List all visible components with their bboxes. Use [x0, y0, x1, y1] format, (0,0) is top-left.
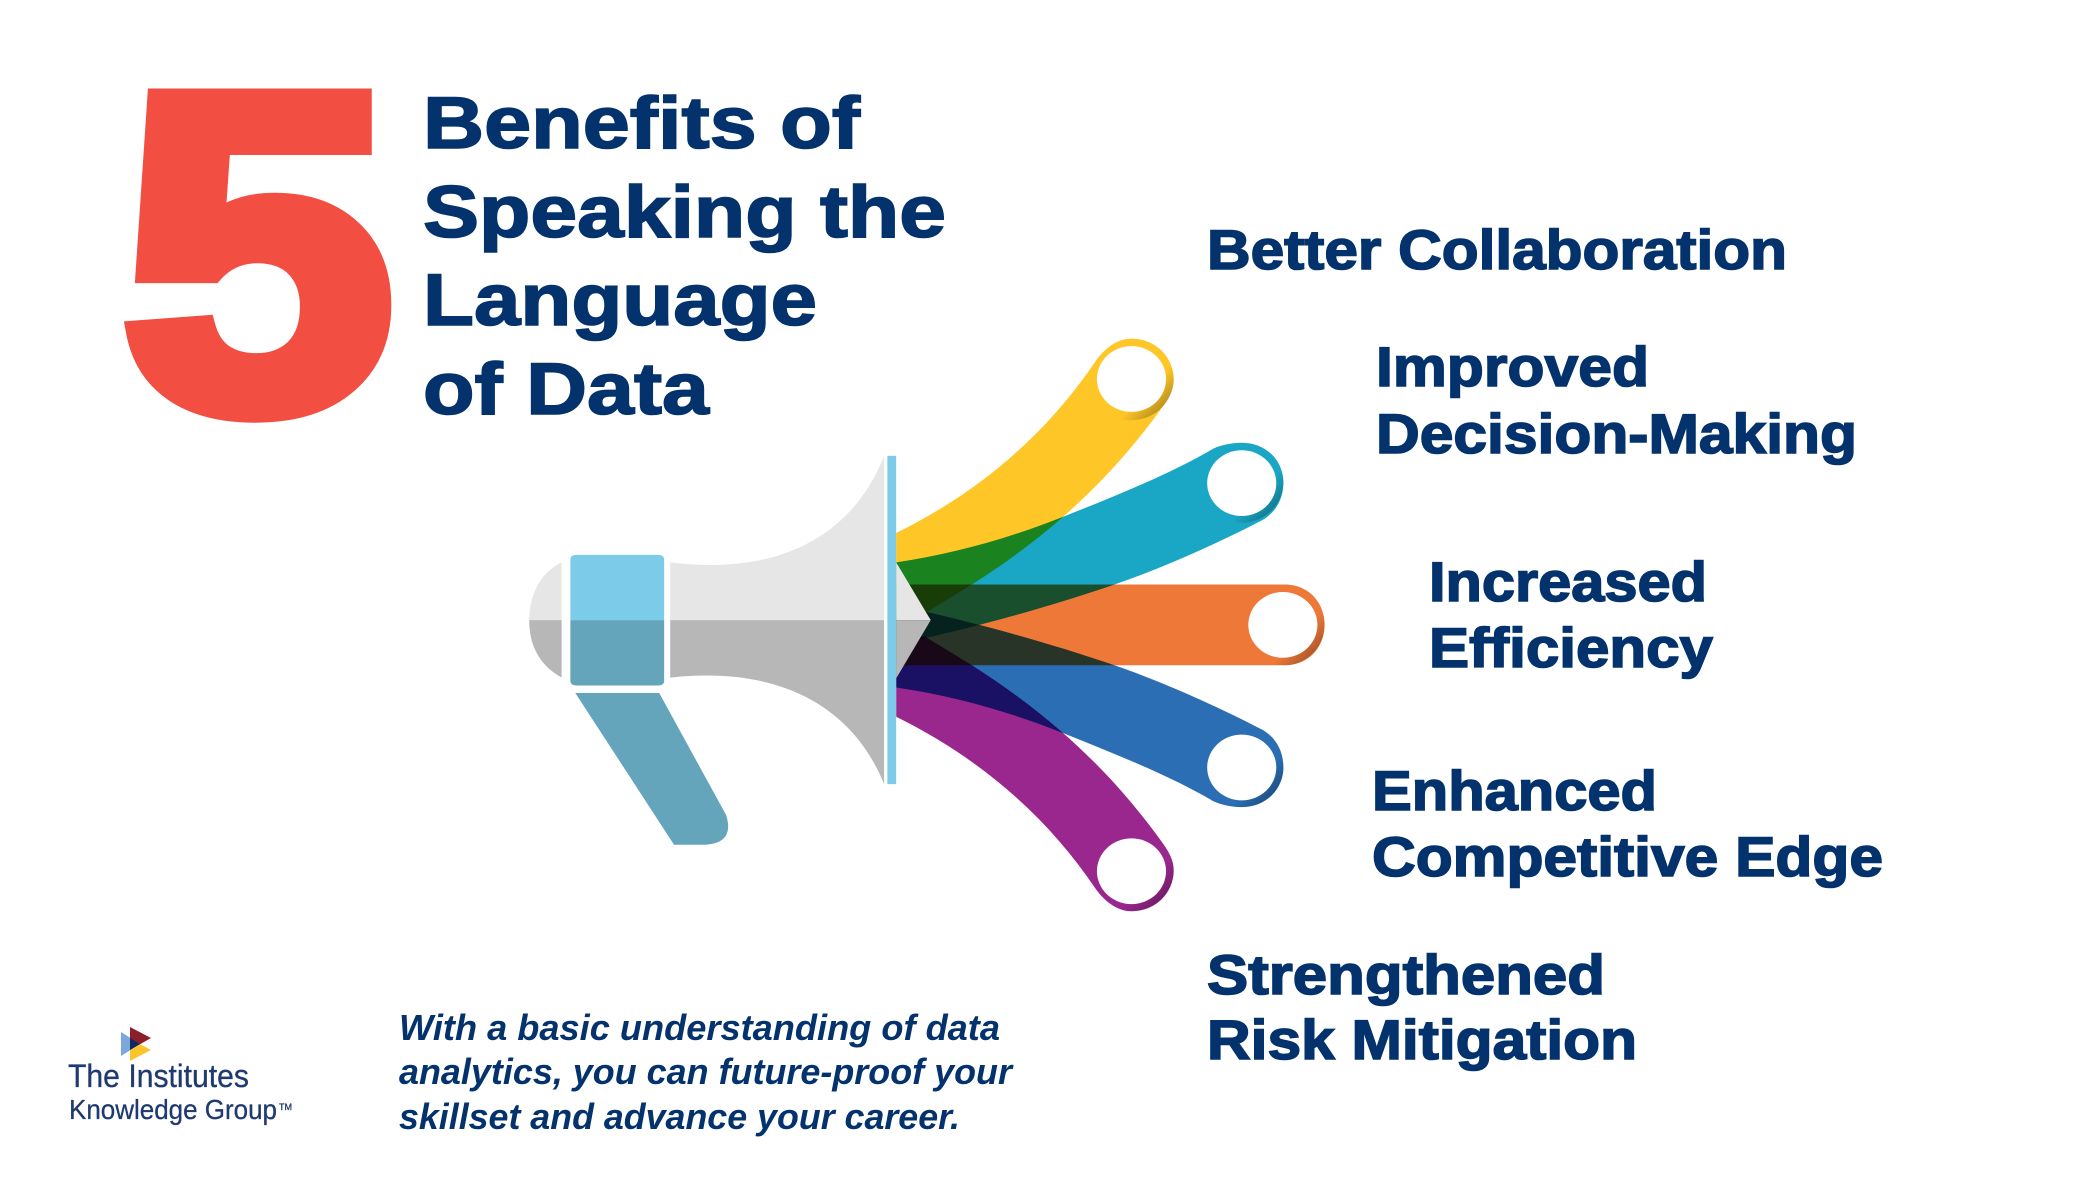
label: Improved Decision-Making: Improved	[1376, 335, 1649, 398]
label: Strengthened Risk Mitigation	[1207, 943, 1637, 1071]
logo text: TM	[279, 1102, 292, 1112]
label: Strengthened Risk Mitigation: Risk Mitigation	[1207, 1008, 1637, 1071]
title: of Data	[423, 349, 711, 430]
title	[423, 83, 946, 430]
megaphone grip	[570, 555, 664, 686]
cap shading	[1088, 339, 1325, 911]
italic tagline: analytics, you can future-proof your	[399, 1051, 1014, 1092]
logo text: Knowledge Group	[69, 1094, 277, 1125]
megaphone rim	[887, 456, 896, 784]
megaphone handle	[575, 693, 728, 845]
label: Increased Efficiency: Efficiency	[1429, 616, 1713, 679]
ribbon: purple	[896, 637, 1174, 911]
logo text	[68, 1058, 292, 1125]
italic tagline: With a basic understanding of data	[399, 1007, 1000, 1048]
ribbon: yellow	[896, 339, 1174, 613]
ribbon: orange	[896, 585, 1325, 665]
label: Better Collaboration: Better Collaboration	[1207, 218, 1787, 281]
megaphone with ribbons	[529, 339, 1325, 911]
label: Increased Efficiency: Increased	[1429, 550, 1707, 613]
logo text: The Institutes	[68, 1058, 249, 1094]
label: Improved Decision-Making	[1376, 335, 1857, 465]
big number 5: 5	[122, 2, 394, 504]
italic tagline: skillset and advance your career.	[399, 1096, 960, 1137]
label: Enhanced Competitive Edge: Enhanced	[1372, 759, 1657, 822]
ribbon: blue	[896, 611, 1283, 807]
white circles	[1097, 346, 1317, 904]
italic tagline	[399, 1007, 1014, 1137]
logo mark	[121, 1027, 151, 1061]
label: Strengthened Risk Mitigation: Strengthened	[1207, 943, 1605, 1006]
title: Language	[423, 260, 817, 341]
label: Enhanced Competitive Edge	[1372, 759, 1883, 888]
title: Speaking the	[423, 172, 946, 253]
title: Benefits of	[423, 83, 861, 164]
label: Enhanced Competitive Edge: Competitive Edge	[1372, 825, 1883, 888]
label: Increased Efficiency	[1429, 550, 1713, 679]
ribbon: teal	[896, 443, 1283, 639]
ribbons	[896, 339, 1325, 911]
logo	[68, 1027, 292, 1125]
megaphone horn	[529, 456, 931, 784]
label: Improved Decision-Making: Decision-Making	[1376, 402, 1857, 465]
